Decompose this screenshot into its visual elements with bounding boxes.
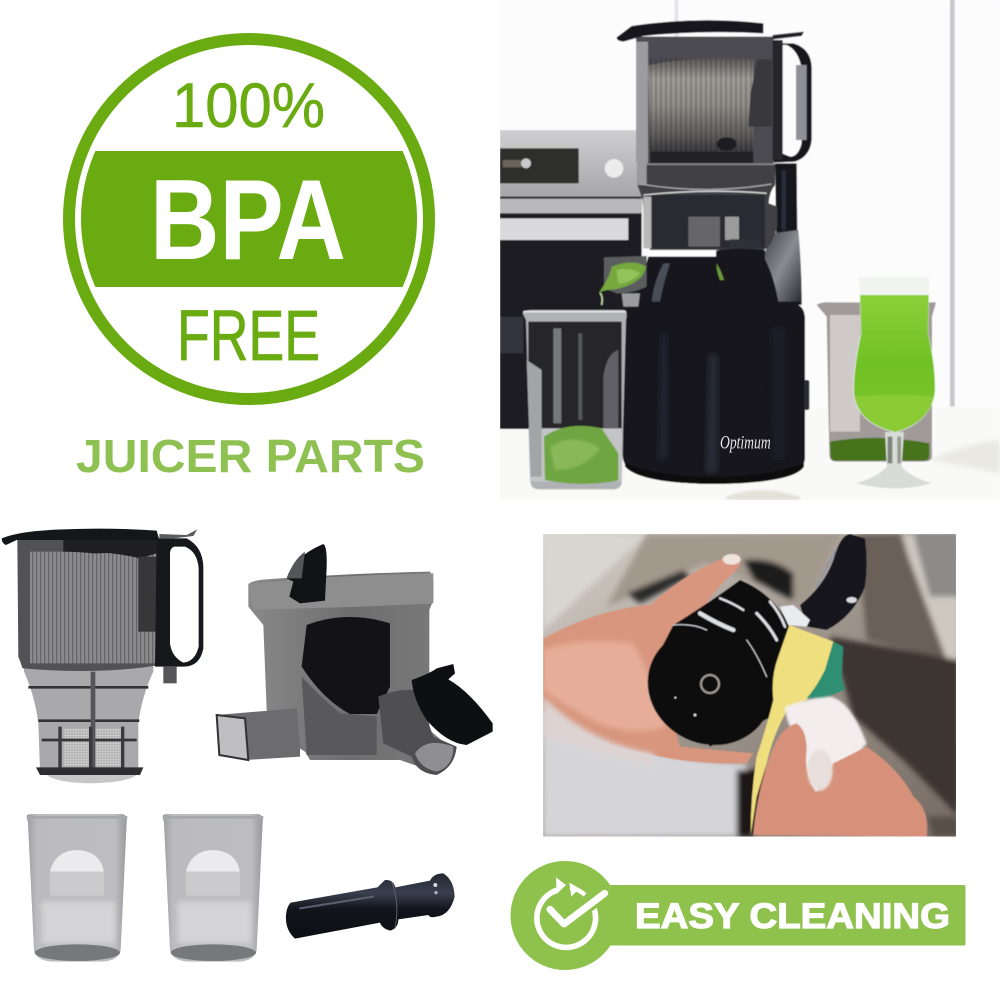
product: pulp cup one (27, 814, 127, 962)
black blade handle (800, 534, 867, 630)
juicer base (623, 305, 809, 484)
hopper lid (617, 20, 763, 42)
middle chamber (637, 163, 777, 250)
text: 100%: 100% (172, 71, 325, 141)
juice spout (715, 248, 766, 260)
badge: easy cleaning (510, 861, 966, 970)
pulp cup (523, 310, 627, 489)
juice outlet (378, 690, 457, 775)
hopper handle (155, 529, 203, 683)
photo: washing part with sponge (543, 534, 959, 837)
badge ring (69, 39, 429, 399)
text: easy cleaning: EASY CLEANING (635, 897, 950, 936)
juicer neck and spine (637, 163, 802, 305)
right hand (753, 723, 927, 837)
badge band (81, 151, 417, 287)
ribbed hopper (17, 540, 160, 671)
chamber body (248, 572, 453, 772)
hopper (636, 37, 773, 163)
sponge (751, 625, 833, 835)
text: FREE: FREE (177, 297, 320, 376)
badge: 100% BPA free (60, 39, 440, 399)
back pitcher (817, 302, 936, 462)
photo: juicer in kitchen (500, 0, 1000, 500)
product: food pusher (286, 873, 455, 939)
inner screw (302, 677, 377, 755)
oven (500, 131, 642, 429)
conical strainer (24, 662, 153, 783)
handle (773, 43, 812, 163)
green circle (510, 861, 620, 970)
product: pulp cup two (163, 814, 263, 962)
product: hopper and strainer (2, 529, 203, 783)
black filter cylinder (647, 580, 790, 747)
counter (632, 464, 803, 482)
green juice glass (853, 277, 935, 488)
text: BPA: BPA (150, 157, 346, 284)
soap foam (780, 605, 810, 627)
square outlet (217, 708, 300, 760)
hopper rim (2, 529, 159, 545)
heading: juicer parts: JUICER PARTS (76, 430, 425, 482)
product: juicing chamber (217, 544, 493, 775)
pulp chute (599, 256, 647, 307)
left hand (543, 553, 753, 764)
brand logo: Optimum (720, 432, 771, 453)
sink blur (543, 534, 959, 837)
top feed (287, 544, 327, 603)
icon: cycle check (537, 877, 605, 947)
outlet cap (412, 664, 493, 745)
green label bar (610, 885, 966, 946)
